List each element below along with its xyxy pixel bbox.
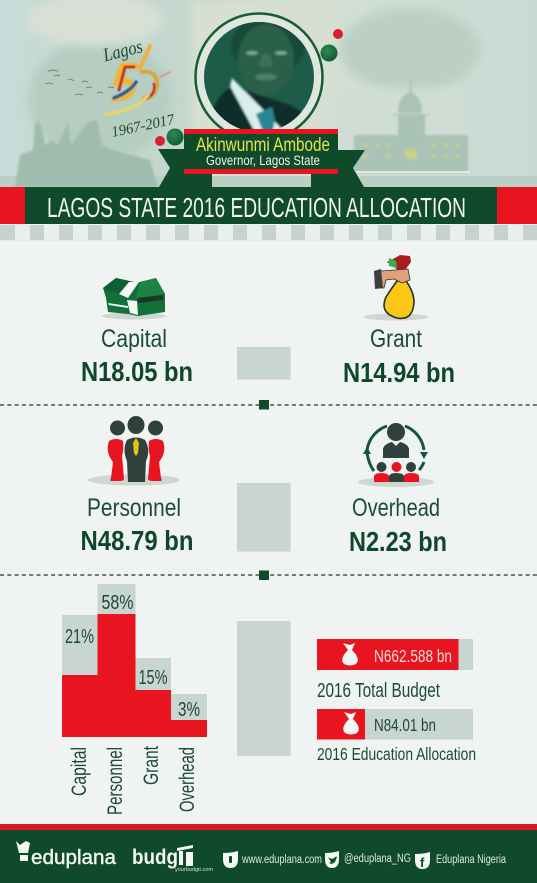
total budget bar: N662.588 bn [374, 646, 452, 666]
grey block: row one [237, 347, 290, 380]
divider one [0, 400, 537, 410]
name plate: Akinwunmi Ambode [196, 135, 330, 156]
logo: eduplana: eduplana [31, 847, 117, 869]
icon: money bag [342, 643, 358, 666]
grey block: row two [237, 483, 290, 552]
panel: grant [343, 255, 455, 388]
facebook contact [415, 852, 506, 870]
personnel value: N48.79 bn [80, 525, 194, 556]
logo: Lagos at 50: 1967-2017 [110, 112, 177, 141]
education allocation label: 2016 Education Allocation [317, 744, 476, 764]
logo: Lagos at 50: Lagos [100, 36, 145, 67]
grant label: Grant [370, 325, 422, 353]
axis labels: Grant [140, 746, 163, 785]
education allocation bar [317, 709, 473, 740]
logo: budgit: budg [132, 846, 178, 869]
personnel label: Personnel [87, 494, 181, 522]
logo: budgit: yourbudgit.com [175, 867, 213, 873]
footer [0, 824, 537, 883]
twitter contact: @eduplana_NG [344, 853, 411, 865]
axis labels [68, 746, 199, 815]
icon: manager and team cycle [358, 423, 434, 487]
bar: capital 21% [62, 615, 98, 737]
bar chart: share of allocation [62, 584, 207, 815]
logo: budgit [132, 845, 213, 873]
bar: overhead 3% [171, 694, 207, 737]
icon: money bag [343, 712, 359, 734]
website contact [223, 851, 322, 868]
checker strip [0, 225, 537, 241]
panel: overhead [349, 423, 447, 557]
panel: personnel [80, 416, 194, 556]
axis labels: Overhead [176, 747, 199, 812]
icon: three business people [88, 416, 180, 486]
ribbon: right tail [311, 150, 365, 187]
grant value: N14.94 bn [343, 357, 455, 388]
bar: capital 21%: 21% [65, 626, 94, 648]
grey block: row three [237, 621, 290, 756]
ribbon: left tail [158, 149, 212, 187]
portrait of Akinwunmi Ambode [196, 14, 322, 140]
overhead label: Overhead [352, 494, 440, 522]
name plate [184, 129, 338, 174]
divider two [0, 570, 537, 580]
icon: hand holding money bag [364, 255, 428, 320]
icon: stack of cash [102, 278, 166, 320]
bar: grant 15% [136, 658, 171, 737]
bar: personnel 58% [98, 584, 136, 737]
logo: eduplana [16, 841, 117, 869]
overhead value: N2.23 bn [349, 526, 447, 557]
education allocation bar: N84.01 bn [374, 715, 436, 735]
axis labels: Personnel [104, 747, 127, 815]
header background: Lagos skyline and State House [0, 0, 537, 187]
facebook contact: f [420, 855, 425, 870]
capital label: Capital [101, 325, 167, 353]
twitter contact [325, 851, 411, 868]
axis labels: Capital [68, 747, 91, 796]
website contact: www.eduplana.com [241, 854, 322, 866]
bar: overhead 3%: 3% [178, 699, 200, 721]
decorative dots [155, 29, 343, 146]
bar: personnel 58%: 58% [102, 592, 134, 614]
capital value: N18.05 bn [81, 356, 193, 387]
name plate: Governor, Lagos State [206, 152, 320, 168]
panel: capital [81, 278, 193, 387]
bar: grant 15%: 15% [138, 667, 168, 689]
total budget label: 2016 Total Budget [317, 680, 440, 702]
facebook contact: Eduplana Nigeria [436, 854, 506, 866]
total budget bar [317, 639, 473, 670]
logo: Lagos at 50 [45, 36, 177, 141]
